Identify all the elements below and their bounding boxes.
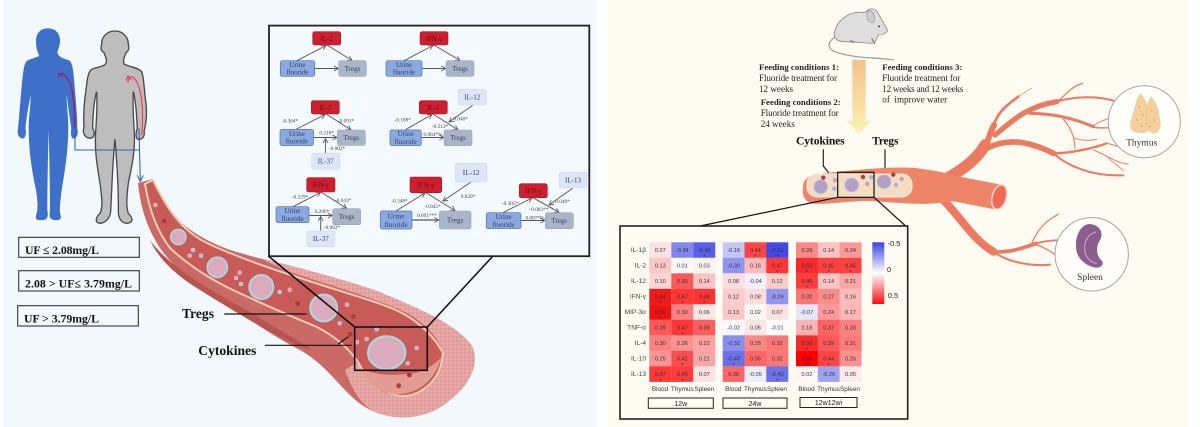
diagram: IFN-γ moderated by IL-13	[486, 172, 587, 229]
diagram: IL-2 moderated by IL-12: IL-12	[464, 93, 481, 101]
row: IL-4: 0.22	[699, 341, 710, 347]
diagram: IFN-γ baseline: IFN-γ	[426, 36, 442, 43]
row: TNF-α	[627, 320, 862, 338]
row: IL-12: 0.08	[728, 279, 739, 285]
column labels: Spleen	[694, 386, 715, 393]
diagram: IL-2 moderated by IL-12: 0.040*	[453, 116, 468, 122]
row: IL-10: -0.40	[727, 356, 740, 362]
label box: low fluoride	[19, 237, 139, 257]
illustration: arterial branches	[930, 83, 1130, 265]
row: IL-13: -0.05	[749, 372, 762, 378]
label box: 24w	[723, 398, 787, 408]
row: TNF-α: -0.02	[727, 325, 740, 331]
row: IL-13: 0.05	[845, 372, 856, 378]
row: IL-1β: *	[703, 254, 706, 260]
diagram: IFN-γ moderated by IL-13: Urine	[496, 213, 512, 221]
arrow: feeding to vessel	[847, 60, 871, 134]
row: IFN-γ	[630, 289, 862, 307]
row: IL-1β: -0.34	[676, 248, 689, 254]
row: IL-4: 0.39	[823, 341, 834, 347]
row: IL-2: *	[776, 270, 779, 276]
text: feeding conditions 2: Fluoride treatment for	[761, 108, 839, 118]
row: IL-12: 0.46	[801, 279, 812, 285]
diagram: IL-2 moderated by IL-37: Tregs	[343, 134, 359, 142]
row: IL-13: -0.26	[822, 372, 835, 378]
diagram: IFN-γ baseline: Urine	[396, 61, 412, 69]
diagram: IL-2 baseline: IL-2	[321, 36, 333, 43]
column labels: Blood	[652, 386, 669, 393]
row: IL-10: *	[733, 363, 736, 369]
row: IFN-γ: 0.16	[845, 294, 856, 300]
row: IL-13: 0.47	[655, 372, 666, 378]
row: MIP-3α: -0.07	[801, 310, 813, 316]
row: MIP-3α: 0.17	[845, 310, 856, 316]
label box: low fluoride: UF ≤ 2.08mg/L	[25, 243, 99, 257]
diagram: IFN-γ moderated by IL-37: 0.206*	[315, 209, 330, 215]
diagram: IFN-γ moderated by IL-13: Tregs	[551, 217, 567, 225]
diagram: IL-2 moderated by IL-37: IL-37	[318, 158, 334, 166]
row: IFN-γ: -0.29	[771, 294, 784, 300]
row: IL-13: *	[776, 378, 779, 384]
legend: colour scale: -0.5	[888, 239, 900, 248]
diagram: IFN-γ moderated by IL-13: fluoride	[493, 221, 515, 229]
row: IFN-γ: 0.48	[699, 294, 710, 300]
diagram: IL-2 moderated by IL-37	[280, 101, 365, 169]
text: feeding conditions 1: 12 weeks	[759, 84, 794, 94]
diagram: IFN-γ moderated by IL-37	[276, 178, 361, 247]
text: feeding conditions 2	[761, 97, 841, 129]
label: Tregs: Tregs	[872, 135, 899, 147]
row: IL-2: 0.47	[772, 263, 783, 269]
row: TNF-α: 0.39	[655, 325, 666, 331]
text: feeding conditions 1	[759, 62, 839, 94]
diagram: IFN-γ moderated by IL-12: 0.091***	[417, 213, 437, 219]
row: MIP-3α: 0.13	[728, 310, 739, 316]
column labels	[652, 386, 860, 393]
label: Cytokines	[796, 134, 845, 177]
row: MIP-3α: 0.07	[772, 310, 783, 316]
label: Cytokines: Cytokines	[796, 134, 845, 147]
diagram: IFN-γ moderated by IL-12: IL-12	[463, 168, 480, 177]
row: IL-2: *	[828, 270, 831, 276]
arrow: sampling connector	[75, 128, 143, 181]
row: IL-4: 0.50	[801, 341, 812, 347]
diagram: IL-2 baseline: Tregs	[345, 65, 361, 73]
row: IL-12	[631, 273, 862, 291]
row: IFN-γ: *	[703, 301, 706, 307]
row: IL-12: -0.04	[749, 279, 762, 285]
row: IL-10: 0.66	[801, 356, 812, 362]
row: IFN-γ: 0.32	[801, 294, 812, 300]
panel: mouse study	[608, 0, 1189, 427]
diagram: IFN-γ moderated by IL-37: -0.043*	[335, 198, 352, 204]
label: Tregs	[182, 306, 307, 321]
row: IL-1β: IL-1β	[631, 247, 646, 254]
icon: woman silhouette	[18, 28, 78, 220]
row: MIP-3α	[625, 304, 862, 322]
diagram: IFN-γ baseline	[386, 32, 474, 76]
row: IFN-γ: IFN-γ	[630, 293, 647, 300]
row: IL-13: IL-13	[631, 371, 646, 378]
label box: 12w12wi: 12w12wi	[815, 400, 843, 407]
diagram: IL-2 baseline: fluoride	[286, 68, 309, 76]
row: IL-2: *	[806, 270, 809, 276]
diagram: IL-2 moderated by IL-12	[390, 89, 486, 146]
diagram: IFN-γ baseline: Tregs	[452, 65, 468, 73]
row: IL-4: 0.28	[750, 341, 761, 347]
diagram: IL-2 moderated by IL-37: IL-2	[319, 105, 332, 112]
row: IL-4: 0.26	[677, 341, 688, 347]
row: MIP-3α: 0.56	[655, 310, 666, 316]
row: IL-10: 0.36	[750, 356, 761, 362]
label: Tregs: Tregs	[182, 306, 214, 321]
row: IL-12: 0.12	[772, 279, 783, 285]
diagram: IFN-γ moderated by IL-12: Urine	[388, 212, 405, 220]
diagram: IL-2 moderated by IL-12: Tregs	[450, 134, 466, 142]
row: MIP-3α: 0.06	[699, 310, 710, 316]
row: IL-13: *	[659, 378, 662, 384]
row: IL-12: 0.39	[677, 279, 688, 285]
row: IL-10: 0.26	[845, 356, 856, 362]
icon: mouse	[829, 9, 894, 60]
row: IL-1β: **	[775, 254, 780, 260]
label box: 24w: 24w	[749, 401, 762, 408]
diagram: IFN-γ moderated by IL-13: 0.087*%	[526, 216, 545, 222]
chart: correlation heatmap	[625, 242, 862, 393]
row: IL-2: 0.01	[677, 263, 688, 269]
zoom lines to heatmap	[700, 197, 906, 226]
diagram: IL-2 moderated by IL-12: fluoride	[395, 138, 417, 146]
row: IL-4	[635, 335, 862, 353]
text: feeding conditions 3: 12 weeks and 12 weeks	[882, 84, 964, 94]
text: feeding conditions 2: Feeding conditions 2:	[761, 97, 841, 107]
row: IL-10: 0.44	[823, 356, 834, 362]
zoom box on vessel	[268, 256, 493, 370]
diagram: IL-2 baseline	[280, 32, 366, 76]
label box: high fluoride: UF > 3.79mg/L	[24, 312, 99, 326]
label: Cytokines	[198, 337, 352, 358]
label box: 12w12wi	[800, 398, 857, 408]
text: feeding conditions 3: Fluoride treatment for	[882, 73, 960, 83]
diagram: IFN-γ moderated by IL-13: -0.083**	[530, 207, 549, 213]
diagram: IL-2 moderated by IL-37: -0.091*	[338, 118, 355, 124]
row: IFN-γ: *	[681, 301, 684, 307]
diagram: IL-2 moderated by IL-12: Urine	[398, 130, 414, 138]
label box: high fluoride	[18, 306, 138, 326]
diagram: IFN-γ moderated by IL-13: 0.040*	[555, 199, 570, 205]
row: MIP-3α: 0.02	[750, 310, 761, 316]
row: IL-12: 0.21	[845, 279, 856, 285]
callout: spleen: Spleen	[1077, 273, 1103, 283]
diagram: IFN-γ moderated by IL-12: IFN-γ	[417, 180, 435, 189]
diagram: IFN-γ moderated by IL-37: fluoride	[281, 215, 304, 223]
column labels: Spleen	[840, 386, 860, 393]
row: IFN-γ: **	[658, 301, 663, 307]
row: IL-1β: *	[754, 254, 757, 260]
diagram: IL-2 moderated by IL-37: fluoride	[286, 138, 308, 146]
column labels: Spleen	[767, 386, 787, 393]
row: IL-10: 0.21	[699, 356, 710, 362]
row: IL-4: -0.32	[727, 341, 740, 347]
row: MIP-3α: 0.24	[823, 310, 834, 316]
row: IL-10: 0.32	[772, 356, 783, 362]
panel: heatmap frame	[620, 226, 908, 419]
text: feeding conditions 3: of improve water	[882, 94, 947, 104]
row: IFN-γ: 0.12	[728, 294, 739, 300]
callout: thymus	[1108, 86, 1180, 158]
row: IL-12: 0.14	[823, 279, 834, 285]
row: IL-1β: -0.51	[771, 248, 784, 254]
row: IL-1β	[631, 242, 862, 260]
row: IL-13	[631, 366, 862, 384]
row: IL-1β: 0.07	[655, 248, 666, 254]
row: TNF-α: 0.38	[699, 325, 710, 331]
row: IL-4: IL-4	[635, 340, 646, 347]
row: IL-2: 0.13	[655, 263, 666, 269]
row: IL-10: *	[828, 363, 831, 369]
row: IL-4: *	[806, 347, 809, 353]
label box: 12w: 12w	[674, 401, 688, 408]
column labels: Thymus	[744, 386, 767, 393]
text: feeding conditions 2: 24 weeks	[761, 119, 795, 129]
row: IL-12: IL-12	[631, 278, 646, 285]
diagram: IFN-γ moderated by IL-12: -0.045*	[424, 204, 441, 210]
diagram: IFN-γ moderated by IL-37: Tregs	[339, 213, 355, 221]
panel: mediation diagrams	[269, 26, 589, 256]
row: IL-2: -0.30	[727, 263, 740, 269]
legend: colour scale: 0.5	[888, 291, 898, 300]
row: IL-10: 0.25	[655, 356, 666, 362]
callout: spleen	[1055, 218, 1128, 291]
column labels: Thymus	[671, 386, 694, 393]
row: IFN-γ: 0.08	[750, 294, 761, 300]
row: IL-13: 0.02	[801, 372, 812, 378]
diagram: IFN-γ moderated by IL-37: Urine	[285, 207, 300, 215]
row: IL-12: 0.14	[699, 279, 710, 285]
diagram: IFN-γ moderated by IL-12: Tregs	[447, 216, 464, 224]
row: IL-1β: 0.28	[801, 248, 812, 254]
column labels: Blood	[725, 386, 742, 393]
row: IL-4: 0.32	[772, 341, 783, 347]
row: IL-12: 0.10	[655, 279, 666, 285]
diagram: IL-2 moderated by IL-12: 0.084*%	[424, 132, 443, 138]
row: TNF-α: -0.01	[771, 325, 784, 331]
diagram: IFN-γ baseline: fluoride	[393, 68, 415, 76]
diagram: IL-2 moderated by IL-37: Urine	[289, 130, 305, 138]
text: feeding conditions 1: Fluoride treatment for	[759, 73, 837, 83]
row: MIP-3α: MIP-3α	[625, 309, 646, 316]
cells: regulatory T cells	[171, 229, 405, 369]
row: IL-4: 0.31	[845, 341, 856, 347]
diagram: IFN-γ moderated by IL-13: -0.305*	[502, 201, 519, 207]
row: IL-2: 0.16	[750, 263, 761, 269]
illustration: blood vessel cross-section	[138, 179, 475, 417]
row: IL-1β: 0.14	[823, 248, 834, 254]
label box: medium fluoride	[19, 271, 139, 291]
diagram: IFN-γ moderated by IL-37: IFN-γ	[313, 182, 329, 189]
diagram: IL-2 moderated by IL-37: -0.002*	[329, 146, 346, 152]
text: feeding conditions 3: Feeding conditions 3:	[882, 62, 962, 72]
text: feeding conditions 1: Feeding conditions 1:	[759, 62, 839, 72]
row: TNF-α: 0.18	[801, 325, 812, 331]
row: IL-2: 0.45	[823, 263, 834, 269]
row: IFN-γ: 0.54	[655, 294, 666, 300]
row: IL-10	[631, 351, 862, 369]
row: MIP-3α: **	[658, 316, 663, 322]
diagram: IFN-γ moderated by IL-12	[380, 163, 487, 229]
row: IFN-γ: 0.47	[677, 294, 688, 300]
diagram: IL-2 moderated by IL-12: -0.188*	[395, 118, 411, 124]
diagram: IL-2 moderated by IL-12: -0.213*	[432, 124, 449, 130]
row: IL-2: 0.03	[699, 263, 710, 269]
diagram: IFN-γ moderated by IL-37: -0.329*	[292, 194, 309, 200]
row: IL-10: ***	[804, 363, 811, 369]
row: IL-4: 0.30	[655, 341, 666, 347]
diagram: IL-2 moderated by IL-37: -0.364*	[282, 118, 299, 124]
row: IL-1β: -0.16	[727, 248, 740, 254]
diagram: IFN-γ moderated by IL-12: -0.348*	[391, 198, 408, 204]
row: IL-1β: 0.44	[750, 248, 761, 254]
legend: colour scale	[872, 239, 900, 304]
panel: human study	[3, 0, 597, 427]
row: TNF-α: 0.30	[845, 325, 856, 331]
row: IL-13: 0.36	[728, 372, 739, 378]
icon: child silhouette	[83, 31, 146, 223]
column labels: Blood	[798, 386, 815, 393]
row: IL-2: *	[849, 270, 852, 276]
row: IL-13: 0.46	[677, 372, 688, 378]
row: IL-2: 0.50	[801, 263, 812, 269]
diagram: IFN-γ moderated by IL-12: 0.020*	[461, 194, 476, 200]
row: TNF-α: 0.37	[823, 325, 834, 331]
label box: medium fluoride: 2.08 > UF≤ 3.79mg/L	[25, 276, 132, 290]
dots: cytokines	[153, 203, 419, 388]
row: TNF-α: 0.06	[750, 325, 761, 331]
column labels: Thymus	[817, 386, 840, 393]
diagram: IL-2 moderated by IL-37: 0.218*	[319, 130, 334, 136]
row: MIP-3α: 0.30	[677, 310, 688, 316]
legend: colour scale: 0	[887, 265, 891, 274]
row: IFN-γ: 0.27	[823, 294, 834, 300]
row: IL-2	[635, 258, 862, 276]
row: IL-2: IL-2	[635, 262, 646, 269]
diagram: IFN-γ moderated by IL-13: IL-13	[565, 176, 581, 184]
diagram: IL-2 moderated by IL-12: IL-2	[427, 105, 440, 112]
row: IL-13: *	[681, 378, 684, 384]
diagram: IFN-γ moderated by IL-13: IFN-γ	[525, 188, 541, 195]
row: TNF-α: TNF-α	[627, 324, 646, 331]
row: IL-1β: 0.24	[845, 248, 856, 254]
diagram: IL-2 baseline: Urine	[290, 61, 305, 69]
label box: 12w	[648, 398, 713, 408]
diagram: IFN-γ moderated by IL-37: -0.002*	[324, 225, 341, 231]
row: TNF-α: *	[681, 332, 684, 338]
diagram: IFN-γ moderated by IL-12: fluoride	[384, 220, 408, 229]
row: IL-10: IL-10	[631, 355, 646, 362]
row: IL-13: 0.07	[699, 372, 710, 378]
row: IL-10: 0.42	[677, 356, 688, 362]
illustration: vessel segment	[803, 167, 1009, 211]
callout: thymus: Thymus	[1126, 138, 1158, 148]
diagram: IFN-γ moderated by IL-37: IL-37	[313, 235, 329, 243]
row: TNF-α: 0.47	[677, 325, 688, 331]
label: Cytokines: Cytokines	[198, 343, 256, 358]
row: IL-12: *	[806, 285, 809, 291]
row: IL-10: *	[681, 363, 684, 369]
label: Tregs	[872, 135, 899, 175]
row: IL-1β: -0.45	[698, 248, 711, 254]
row: IL-2: 0.45	[845, 263, 856, 269]
row: IL-13: -0.40	[771, 372, 784, 378]
text: feeding conditions 3	[882, 62, 964, 104]
